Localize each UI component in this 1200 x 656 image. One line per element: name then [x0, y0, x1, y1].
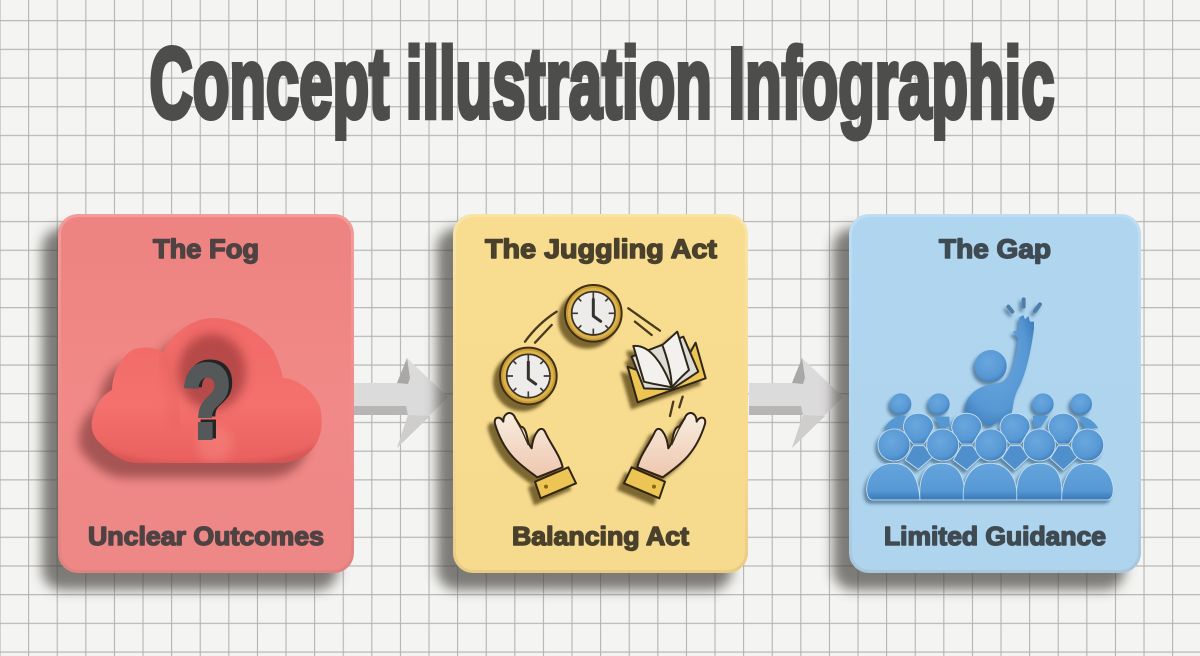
icon: right hand: [624, 413, 705, 498]
icon: cloud with question mark: ?: [185, 341, 235, 459]
icon: cloud with question mark: [79, 318, 322, 478]
icon: cloud with question mark: ?: [182, 343, 232, 461]
middle row people: [878, 413, 1104, 470]
raised arm figure: [965, 315, 1034, 427]
icon: juggling clocks, book and hands: [495, 285, 706, 498]
back row people: [884, 393, 1098, 428]
panel: the gap: [833, 214, 1141, 590]
caption: balancing act: Balancing Act: [512, 521, 689, 551]
caption: unclear outcomes: Unclear Outcomes: [88, 521, 324, 551]
caption: limited guidance: Limited Guidance: [884, 521, 1106, 551]
front row people: [867, 463, 1113, 500]
icon: left hand: [495, 413, 576, 498]
icon: left clock: [500, 348, 557, 404]
panel: the fog: [42, 214, 354, 590]
panel: the juggling act: [437, 214, 748, 590]
heading: the juggling act: The Juggling Act: [485, 234, 717, 264]
heading: the gap: The Gap: [939, 234, 1051, 264]
icon: crowd with one raised hand: [867, 299, 1113, 500]
arrow: fog to juggling: [354, 358, 448, 448]
icon: open book: [628, 332, 706, 402]
heading: the fog: The Fog: [153, 234, 259, 264]
arrow: juggling to gap: [749, 358, 843, 448]
icon: top clock: [565, 285, 622, 342]
